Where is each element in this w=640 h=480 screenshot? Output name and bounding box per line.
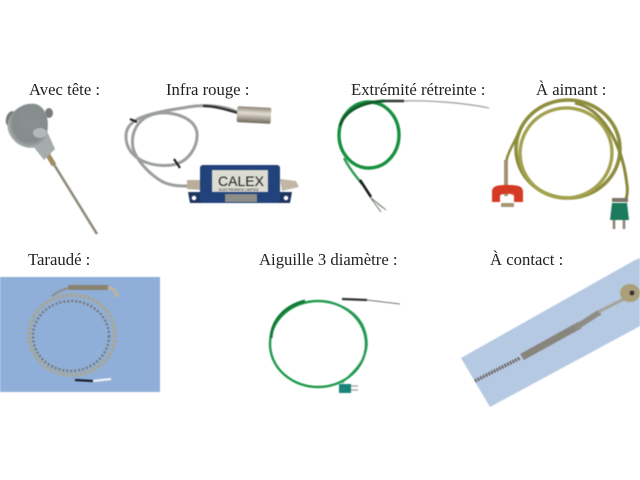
label: À contact: À contact : — [490, 250, 563, 269]
photo: capteur infra rouge — [126, 106, 299, 203]
photo: thermocouple à contact — [461, 258, 640, 407]
photo: thermocouple taraudé — [0, 277, 160, 392]
label: Infra rouge: Infra rouge : — [166, 80, 249, 99]
photo: thermocouple extrémité rétreinte — [339, 101, 489, 212]
photo: thermocouple à aimant — [492, 99, 629, 229]
photo: thermocouple avec tête — [4, 104, 97, 234]
label: Taraudé: Taraudé : — [28, 250, 90, 269]
photo: capteur infra rouge: CALEX — [218, 173, 265, 189]
label: Aiguille 3 diamètre: Aiguille 3 diamètre : — [259, 250, 398, 269]
photo: capteur infra rouge: ELECTRONICS LIMITED — [219, 188, 259, 192]
photo: thermocouple aiguille — [270, 299, 400, 393]
label: À aimant: À aimant : — [536, 80, 606, 99]
label: Avec tête: Avec tête : — [29, 80, 100, 99]
label: Extrémité rétreinte: Extrémité rétreinte : — [351, 80, 485, 99]
